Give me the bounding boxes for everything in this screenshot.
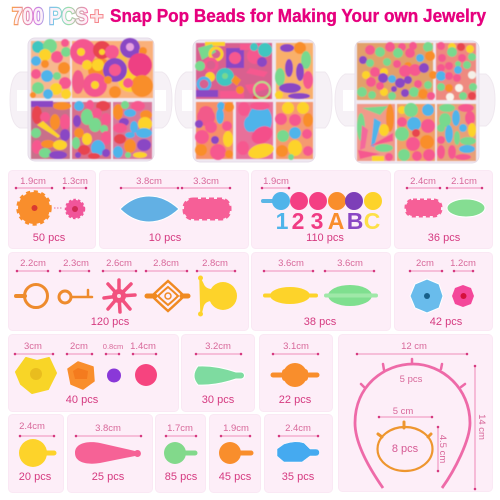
panel: 120 pcs connector beads: 2.8cm: [153, 258, 179, 269]
panel: 38 pcs long beads: [252, 252, 390, 330]
panel: 45 pcs orange bead: 45 pcs: [219, 471, 252, 483]
panel: 25 pcs pink teardrop bead: 3.8cm: [95, 423, 121, 434]
panel: 110 pcs number and letter beads: 1.9cm: [263, 176, 289, 187]
panel: 120 pcs connector beads: 2.6cm: [106, 258, 132, 269]
panel: 30 pcs cone bead: 30 pcs: [202, 394, 235, 406]
panel: 40 pcs flower and small beads: 0.8cm: [103, 342, 123, 351]
panel: headband and bracelet: [338, 334, 492, 492]
panel: 40 pcs flower and small beads: 1.4cm: [130, 341, 156, 352]
panel: 120 pcs connector beads: 120 pcs: [91, 316, 130, 328]
panel: 120 pcs connector beads: 2.8cm: [202, 258, 228, 269]
panel: 20 pcs yellow bead: [8, 414, 64, 492]
panel: 110 pcs number and letter beads: C: [364, 208, 380, 234]
panel: 30 pcs cone bead: 3.2cm: [205, 341, 231, 352]
panel: 35 pcs blue bead: 2.4cm: [285, 423, 311, 434]
panel: 35 pcs blue bead: [264, 414, 332, 492]
panel: 10 pcs large beads: 3.8cm: [136, 176, 162, 187]
panel: 36 pcs beads: 2.1cm: [451, 176, 477, 187]
panel: 42 pcs round beads: 2cm: [416, 258, 434, 269]
panel: 10 pcs large beads: [100, 170, 248, 248]
panel: 85 pcs green bead: 85 pcs: [165, 471, 198, 483]
panel: headband and bracelet: 5 cm: [393, 406, 413, 417]
panel: 120 pcs connector beads: 2.2cm: [20, 258, 46, 269]
box 3: beads in clear case: [335, 41, 495, 163]
panel: 120 pcs connector beads: [8, 252, 248, 330]
panel: 110 pcs number and letter beads: 1: [276, 208, 289, 234]
panel: 45 pcs orange bead: 1.9cm: [223, 423, 249, 434]
panel: 10 pcs large beads: 3.3cm: [193, 176, 219, 187]
title: Snap Pop Beads for Making Your own Jewelry: [110, 6, 486, 26]
panel: 110 pcs number and letter beads: 3: [311, 208, 323, 234]
panel: 50 pcs gear beads: [8, 170, 96, 248]
panel: 20 pcs yellow bead: 20 pcs: [19, 471, 52, 483]
panel: 40 pcs flower and small beads: [8, 334, 178, 412]
panel: 110 pcs number and letter beads: 2: [292, 208, 304, 234]
panel: 42 pcs round beads: [394, 252, 492, 330]
panel: 40 pcs flower and small beads: 3cm: [24, 341, 42, 352]
panel: 85 pcs green bead: [156, 414, 206, 492]
panel: headband and bracelet: 5 pcs: [400, 374, 423, 385]
panel: 10 pcs large beads: 10 pcs: [149, 232, 182, 244]
panel: 35 pcs blue bead: 35 pcs: [282, 471, 315, 483]
box 2: beads in clear case: [175, 40, 332, 162]
panel: 50 pcs gear beads: 50 pcs: [33, 232, 66, 244]
panel: 50 pcs gear beads: 1.3cm: [62, 176, 88, 187]
panel: 40 pcs flower and small beads: 2cm: [70, 341, 88, 352]
panel: headband and bracelet: 14 cm: [476, 414, 487, 440]
panel: 38 pcs long beads: 3.6cm: [337, 258, 363, 269]
panel: 120 pcs connector beads: 2.3cm: [63, 258, 89, 269]
panel: 25 pcs pink teardrop bead: [68, 414, 152, 492]
panel: headband and bracelet: 8 pcs: [392, 443, 419, 455]
panel: 20 pcs yellow bead: 2.4cm: [19, 421, 45, 432]
panel: 50 pcs gear beads: 1.9cm: [20, 176, 46, 187]
panel: 22 pcs ball bead: 22 pcs: [279, 394, 312, 406]
panel: 42 pcs round beads: 42 pcs: [430, 316, 463, 328]
panel: 85 pcs green bead: 1.7cm: [167, 423, 193, 434]
panel: 38 pcs long beads: 3.6cm: [278, 258, 304, 269]
panel: headband and bracelet: 12 cm: [401, 341, 427, 352]
title badge: 700 PCS+: 700 PCS: [12, 3, 88, 29]
panel: 42 pcs round beads: 1.2cm: [450, 258, 476, 269]
panel: 36 pcs beads: 36 pcs: [428, 232, 461, 244]
box 1: beads in clear case: [10, 38, 172, 161]
panel: headband and bracelet: 4.5 cm: [437, 435, 448, 463]
panel: 22 pcs ball bead: [260, 334, 332, 412]
panel: 110 pcs number and letter beads: A: [328, 208, 344, 234]
title badge: 700 PCS+: +: [90, 3, 103, 29]
panel: 110 pcs number and letter beads: 110 pcs: [306, 232, 344, 244]
panel: 36 pcs beads: [394, 170, 492, 248]
panel: 30 pcs cone bead: [182, 334, 254, 412]
panel: 45 pcs orange bead: [210, 414, 260, 492]
panel: 40 pcs flower and small beads: 40 pcs: [66, 394, 99, 406]
panel: 38 pcs long beads: 38 pcs: [304, 316, 337, 328]
panel: 110 pcs number and letter beads: B: [347, 208, 363, 234]
panel: 110 pcs number and letter beads: [252, 170, 390, 248]
panel: 36 pcs beads: 2.4cm: [410, 176, 436, 187]
panel: 25 pcs pink teardrop bead: 25 pcs: [92, 471, 125, 483]
panel: 22 pcs ball bead: 3.1cm: [283, 341, 309, 352]
